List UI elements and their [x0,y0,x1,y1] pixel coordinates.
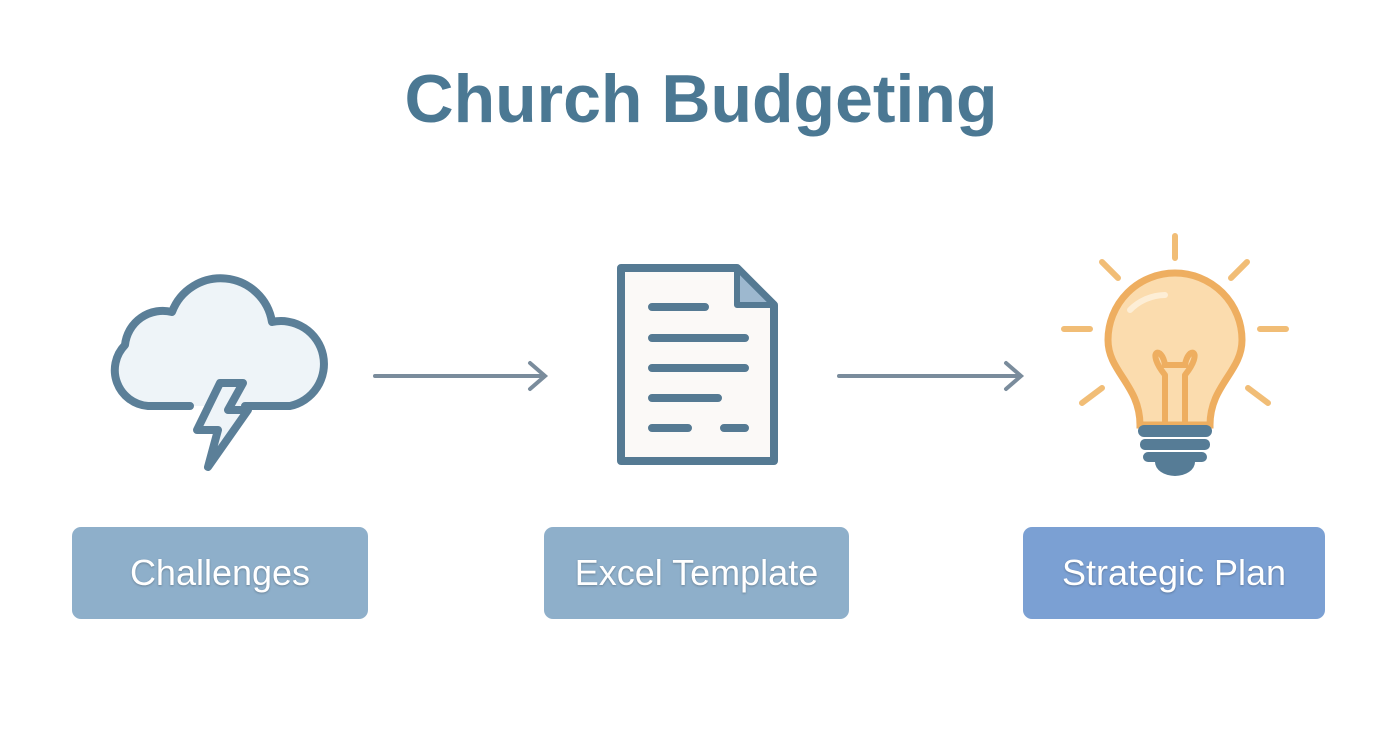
button: Challenges [72,527,368,619]
icon: document [621,268,774,461]
arrow 1 [375,363,545,389]
button: Excel Template [544,527,849,619]
button: Strategic Plan: Strategic Plan [1062,552,1286,593]
icon: light bulb [1064,236,1286,476]
button: Excel Template: Excel Template [575,552,818,593]
icon: storm cloud [115,278,324,467]
title: Church Budgeting [404,61,998,137]
arrow 2 [839,363,1021,389]
button: Challenges: Challenges [130,552,310,593]
button: Strategic Plan [1023,527,1325,619]
